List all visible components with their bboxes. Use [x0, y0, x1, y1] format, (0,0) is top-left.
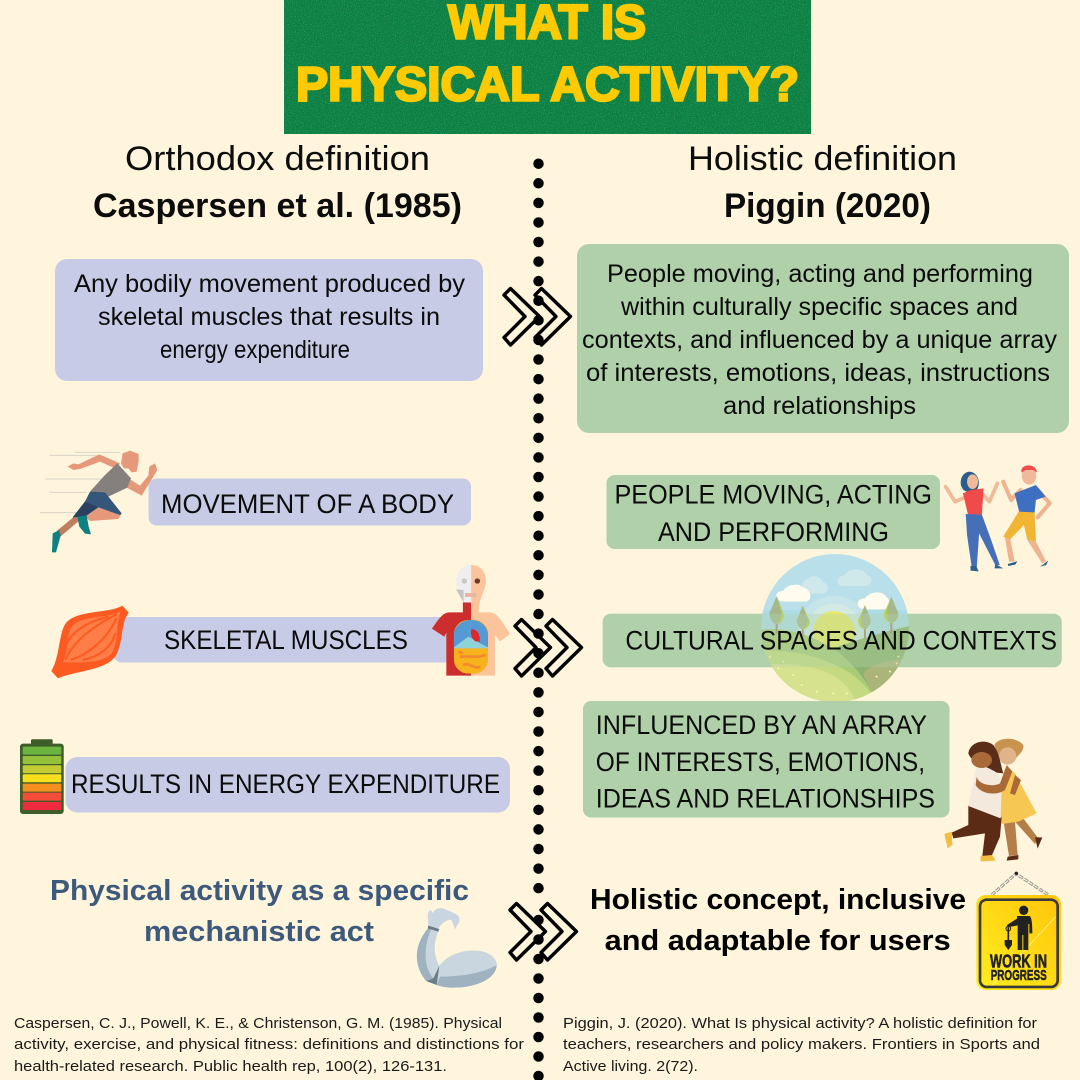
- conclusion: orthodox: Physical activity as a specific: [50, 875, 469, 907]
- arrow: spaces and muscles: [515, 620, 582, 676]
- label: results in energy expenditure: [66, 757, 510, 812]
- heading: orthodox definition: [93, 140, 462, 225]
- label: influenced by an array: OF INTERESTS, EMOTIONS,: [596, 747, 925, 777]
- icon: work in progress sign: [976, 872, 1061, 990]
- label: skeletal muscles: [113, 617, 453, 662]
- heading: holistic definition: Piggin (2020): [724, 187, 931, 225]
- conclusion: holistic: and adaptable for users: [605, 925, 951, 957]
- icon: human body anatomy: [432, 565, 510, 676]
- conclusion: orthodox second line: mechanistic act: [144, 916, 374, 948]
- conclusion: holistic: Holistic concept, inclusive: [590, 884, 966, 916]
- reference: Caspersen: activity, exercise, and physical fitness: definitions and distinctions for: [14, 1036, 524, 1053]
- heading: orthodox definition: Caspersen et al. (1985): [93, 187, 462, 225]
- label: people moving: [606, 475, 940, 549]
- label: movement of a body: MOVEMENT OF A BODY: [161, 489, 454, 519]
- panel: holistic definition text: People moving, acting and performing: [607, 260, 1033, 288]
- title banner: [284, 0, 811, 134]
- icon: muscle: [51, 606, 129, 678]
- reference: Piggin: Active living. 2(72).: [563, 1058, 698, 1075]
- overlay tint of label box: [603, 614, 1062, 667]
- label: influenced by an array: IDEAS AND RELATIONSHIPS: [596, 784, 935, 814]
- icon: battery: [20, 739, 64, 814]
- arrow: definitions: [504, 288, 570, 345]
- label: influenced by an array: [583, 701, 950, 818]
- conclusion: holistic: [590, 884, 966, 957]
- label: people moving: PEOPLE MOVING, ACTING: [614, 480, 932, 510]
- icon: dancers: [946, 465, 1050, 571]
- label: influenced by an array: INFLUENCED BY AN ARRAY: [596, 710, 927, 740]
- heading: holistic definition: Holistic definition: [688, 140, 957, 178]
- heading: holistic definition: [688, 140, 957, 225]
- reference: Caspersen: [14, 1015, 524, 1075]
- panel: orthodox definition text: skeletal muscles that results in: [98, 303, 440, 331]
- icon: work in progress sign: PROGRESS: [991, 968, 1047, 984]
- label: skeletal muscles: SKELETAL MUSCLES: [164, 625, 408, 655]
- label: cultural spaces and contexts with landscape: [603, 553, 1062, 703]
- label: movement of a body: [148, 478, 471, 526]
- panel: orthodox definition text: energy expenditure: [160, 336, 350, 364]
- panel: holistic definition text: and relationships: [723, 392, 916, 420]
- panel: holistic definition text: of interests, emotions, ideas, instructions: [586, 359, 1050, 387]
- label: people moving: AND PERFORMING: [658, 517, 889, 547]
- reference: Caspersen: Caspersen, C. J., Powell, K. E., & Christenson, G. M. (1985). Physical: [14, 1015, 502, 1032]
- icon: work in progress sign: WORK IN: [990, 951, 1047, 971]
- icon: runner: [40, 451, 157, 552]
- panel: orthodox definition text: [55, 259, 483, 381]
- icon: flexed arm: [417, 908, 497, 988]
- arrow: conclusions: [510, 904, 576, 960]
- reference: Caspersen: health-related research. Public health rep, 100(2), 126-131.: [14, 1058, 447, 1075]
- panel: orthodox definition text: Any bodily movement produced by: [74, 270, 466, 298]
- label: results in energy expenditure: RESULTS IN ENERGY EXPENDITURE: [71, 769, 500, 799]
- title banner: PHYSICAL ACTIVITY?: [296, 58, 799, 111]
- icon: landscape circle: [760, 553, 910, 703]
- reference: Piggin: Piggin, J. (2020). What Is physical activity? A holistic definition for: [563, 1015, 1037, 1032]
- reference: Piggin: [563, 1015, 1040, 1075]
- panel: holistic definition text: within culturally specific spaces and: [620, 293, 1018, 321]
- icon: hugging friends: [944, 739, 1042, 861]
- reference: Piggin: teachers, researchers and policy makers. Frontiers in Sports and: [563, 1036, 1040, 1053]
- heading: orthodox definition: Orthodox definition: [125, 140, 430, 178]
- panel: holistic definition text: contexts, and influenced by a unique array: [582, 326, 1057, 354]
- dotted vertical divider: [533, 164, 544, 1080]
- panel: holistic definition text: [577, 244, 1069, 433]
